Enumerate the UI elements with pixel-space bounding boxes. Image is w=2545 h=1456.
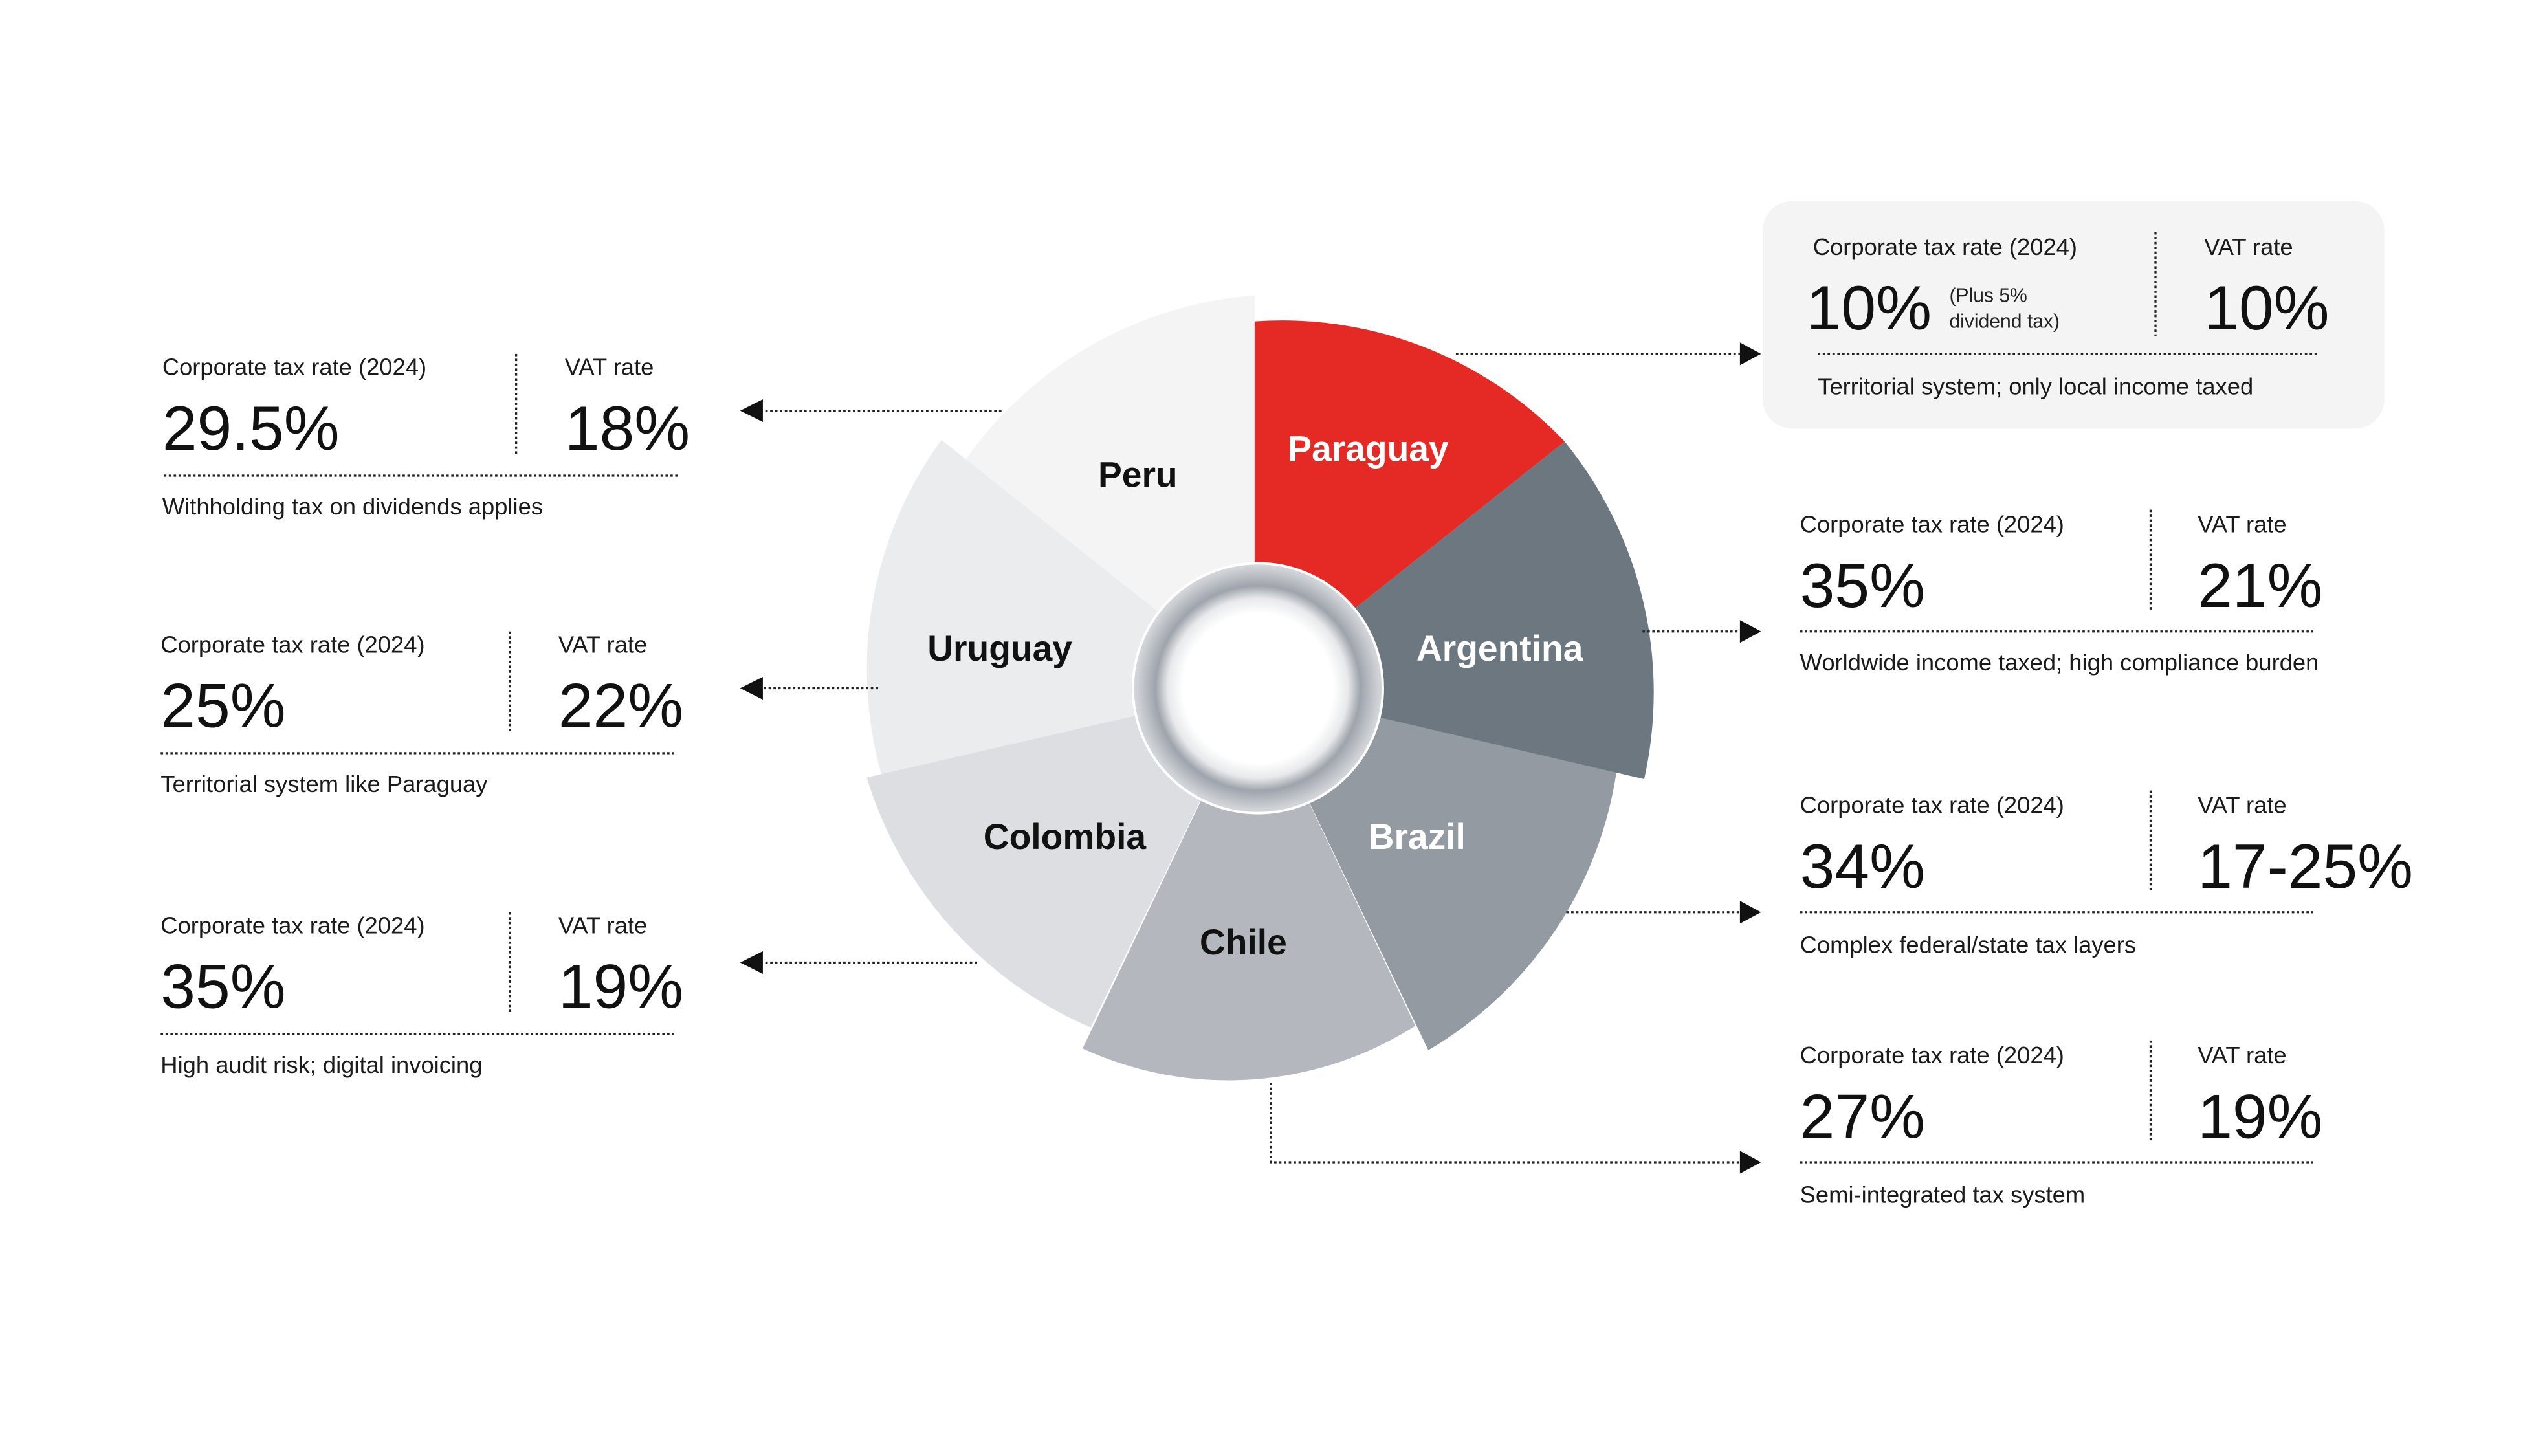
panel: Colombia: High audit risk; digital invoicing bbox=[160, 1052, 482, 1078]
country labels: Brazil bbox=[1369, 817, 1466, 857]
panel: Brazil: 17-25% bbox=[2198, 832, 2413, 901]
panel: Chile: Corporate tax rate (2024) bbox=[1800, 1042, 2064, 1068]
panel: Paraguay: (Plus 5% bbox=[1949, 285, 2027, 307]
panel: Argentina: VAT rate bbox=[2198, 511, 2287, 538]
sector: Chile bbox=[1083, 689, 1415, 1081]
panel: Peru bbox=[162, 353, 690, 520]
panel: Uruguay: 25% bbox=[160, 672, 286, 741]
panel: Peru: Withholding tax on dividends applies bbox=[162, 493, 543, 520]
panel: Peru: Corporate tax rate (2024) bbox=[162, 353, 426, 380]
sector: Uruguay bbox=[867, 440, 1255, 774]
country labels: Paraguay bbox=[1288, 428, 1449, 469]
country labels: Chile bbox=[1200, 922, 1287, 962]
panel: Colombia: Corporate tax rate (2024) bbox=[160, 912, 425, 938]
panel: Chile: Semi-integrated tax system bbox=[1800, 1182, 2085, 1208]
panel: Peru: VAT rate bbox=[565, 353, 654, 380]
panel: Colombia bbox=[160, 912, 683, 1078]
arrow: Argentina bbox=[1642, 620, 1761, 643]
arrow: Colombia bbox=[740, 951, 977, 974]
panel: Brazil: VAT rate bbox=[2198, 792, 2287, 819]
panel: Brazil bbox=[1800, 791, 2413, 958]
panel: Peru: 18% bbox=[565, 394, 690, 463]
panel: Paraguay: 10% bbox=[2204, 274, 2330, 343]
sector: Brazil bbox=[1255, 689, 1616, 1050]
sector: Peru bbox=[965, 296, 1255, 689]
panel: Uruguay: Corporate tax rate (2024) bbox=[160, 631, 425, 657]
arrow: Brazil bbox=[1567, 901, 1761, 923]
panel: Colombia: 35% bbox=[160, 953, 286, 1022]
arrow: Chile bbox=[1271, 1083, 1761, 1174]
panel: Peru: 29.5% bbox=[162, 394, 340, 463]
panel: Uruguay: Territorial system like Paraguay bbox=[160, 771, 488, 797]
panel: Argentina: 35% bbox=[1800, 551, 1925, 621]
panel: Paraguay: dividend tax) bbox=[1949, 311, 2060, 333]
panel: Brazil: Complex federal/state tax layers bbox=[1800, 931, 2136, 958]
panel: Paraguay bbox=[1763, 201, 2385, 428]
country labels bbox=[927, 428, 1584, 962]
panel: Uruguay: 22% bbox=[558, 672, 683, 741]
panel: Colombia: VAT rate bbox=[558, 912, 647, 938]
arrow: Peru bbox=[740, 399, 1002, 422]
pie chart bbox=[866, 296, 1654, 1081]
panel: Argentina bbox=[1800, 510, 2323, 676]
panel: Paraguay: VAT rate bbox=[2204, 234, 2293, 260]
sector: Colombia bbox=[866, 689, 1255, 1028]
arrow: Paraguay bbox=[1456, 342, 1761, 365]
country labels: Argentina bbox=[1416, 628, 1584, 668]
panel: Argentina: Corporate tax rate (2024) bbox=[1800, 511, 2064, 538]
country labels: Uruguay bbox=[927, 628, 1072, 668]
panel: Paraguay: Corporate tax rate (2024) bbox=[1813, 234, 2077, 260]
panel: Uruguay: VAT rate bbox=[558, 631, 647, 657]
panel: Chile bbox=[1800, 1041, 2323, 1208]
panel: Paraguay: Territorial system; only local income taxed bbox=[1818, 373, 2253, 400]
panel: Colombia: 19% bbox=[558, 953, 683, 1022]
panel: Brazil: Corporate tax rate (2024) bbox=[1800, 792, 2064, 819]
panel: Paraguay: 10% bbox=[1807, 274, 1932, 343]
center ring bbox=[1133, 563, 1383, 813]
panel: Chile: 27% bbox=[1800, 1082, 1925, 1151]
panel: Chile: 19% bbox=[2198, 1082, 2323, 1151]
country labels: Peru bbox=[1098, 455, 1178, 495]
panel: Argentina: Worldwide income taxed; high compliance burden bbox=[1800, 649, 2319, 676]
panel: Chile: VAT rate bbox=[2198, 1042, 2287, 1068]
arrows connectors bbox=[740, 342, 1761, 1174]
panel: Brazil: 34% bbox=[1800, 832, 1925, 901]
country labels: Colombia bbox=[984, 817, 1147, 857]
arrow: Uruguay bbox=[740, 677, 878, 700]
panel: Uruguay bbox=[160, 631, 683, 797]
sector: Paraguay bbox=[1255, 320, 1565, 689]
panel: Argentina: 21% bbox=[2198, 551, 2323, 621]
sector: Argentina bbox=[1255, 441, 1654, 779]
